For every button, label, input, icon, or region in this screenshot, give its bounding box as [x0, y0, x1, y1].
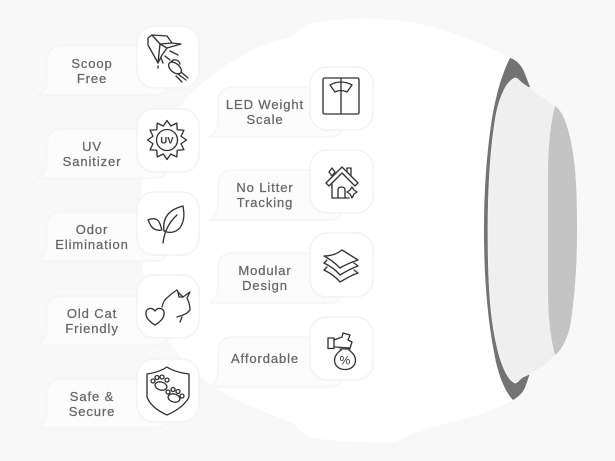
grey panel	[548, 106, 577, 355]
icon: weight scale	[323, 78, 359, 114]
icon: leaf	[148, 206, 184, 243]
feature: Old Cat Friendly: Friendly	[65, 321, 119, 336]
light cover	[488, 78, 555, 383]
feature: Safe & Secure	[39, 359, 199, 428]
icon: shield with paws	[147, 367, 189, 415]
feature: No Litter Tracking	[210, 150, 373, 220]
feature: Affordable	[210, 317, 373, 387]
feature: Safe & Secure: Secure	[69, 404, 115, 419]
feature: Scoop Free: Free	[77, 71, 107, 86]
bubble	[39, 296, 168, 345]
tile	[137, 192, 199, 255]
bubble	[210, 87, 343, 137]
label: Modular	[238, 263, 292, 278]
tile	[137, 359, 199, 422]
label: Old Cat	[67, 306, 117, 321]
icon: house with sparkles	[326, 167, 358, 198]
bubble	[39, 46, 168, 95]
feature: LED Weight Scale	[210, 67, 373, 137]
label: Scoop	[71, 56, 113, 71]
tile	[310, 317, 373, 380]
feature: UV Sanitizer: Sanitizer	[63, 154, 121, 169]
feature: Modular Design	[210, 233, 373, 303]
bubble	[39, 212, 168, 261]
tile	[137, 26, 199, 88]
feature: No Litter Tracking: Tracking	[237, 195, 293, 210]
bubble	[210, 337, 343, 387]
icon: UV sun: UV	[160, 136, 174, 146]
bubble	[39, 379, 168, 428]
label: Safe &	[70, 389, 114, 404]
icon: scoop and shower head	[148, 35, 188, 82]
tile	[310, 150, 373, 213]
bubble	[39, 129, 168, 178]
feature: Odor Elimination	[39, 192, 199, 261]
bubble	[210, 253, 343, 303]
feature: UV Sanitizer	[39, 109, 199, 178]
feature: Odor Elimination: Elimination	[55, 237, 129, 252]
icon: stacked layers	[324, 250, 358, 282]
cat litter box end cap	[484, 58, 577, 400]
device body	[140, 19, 513, 442]
feature: Modular Design: Design	[242, 278, 288, 293]
icon: heart and cat	[146, 290, 190, 325]
feature: Scoop Free	[39, 26, 199, 95]
tile	[310, 67, 373, 130]
label: No Litter	[236, 180, 294, 195]
label: UV	[82, 139, 102, 154]
icon: UV sun	[148, 120, 186, 160]
tile	[137, 275, 199, 338]
tile	[137, 109, 199, 172]
label: LED Weight	[226, 97, 304, 112]
tile	[310, 233, 373, 297]
dark rim	[484, 58, 530, 400]
label: Affordable	[231, 351, 299, 366]
icon: hand with percent bag	[328, 333, 356, 370]
bubble	[210, 170, 343, 220]
icon: hand with percent bag: %	[340, 354, 351, 368]
label: Odor	[76, 222, 108, 237]
feature: LED Weight Scale: Scale	[246, 112, 284, 127]
feature: Old Cat Friendly	[39, 275, 199, 345]
